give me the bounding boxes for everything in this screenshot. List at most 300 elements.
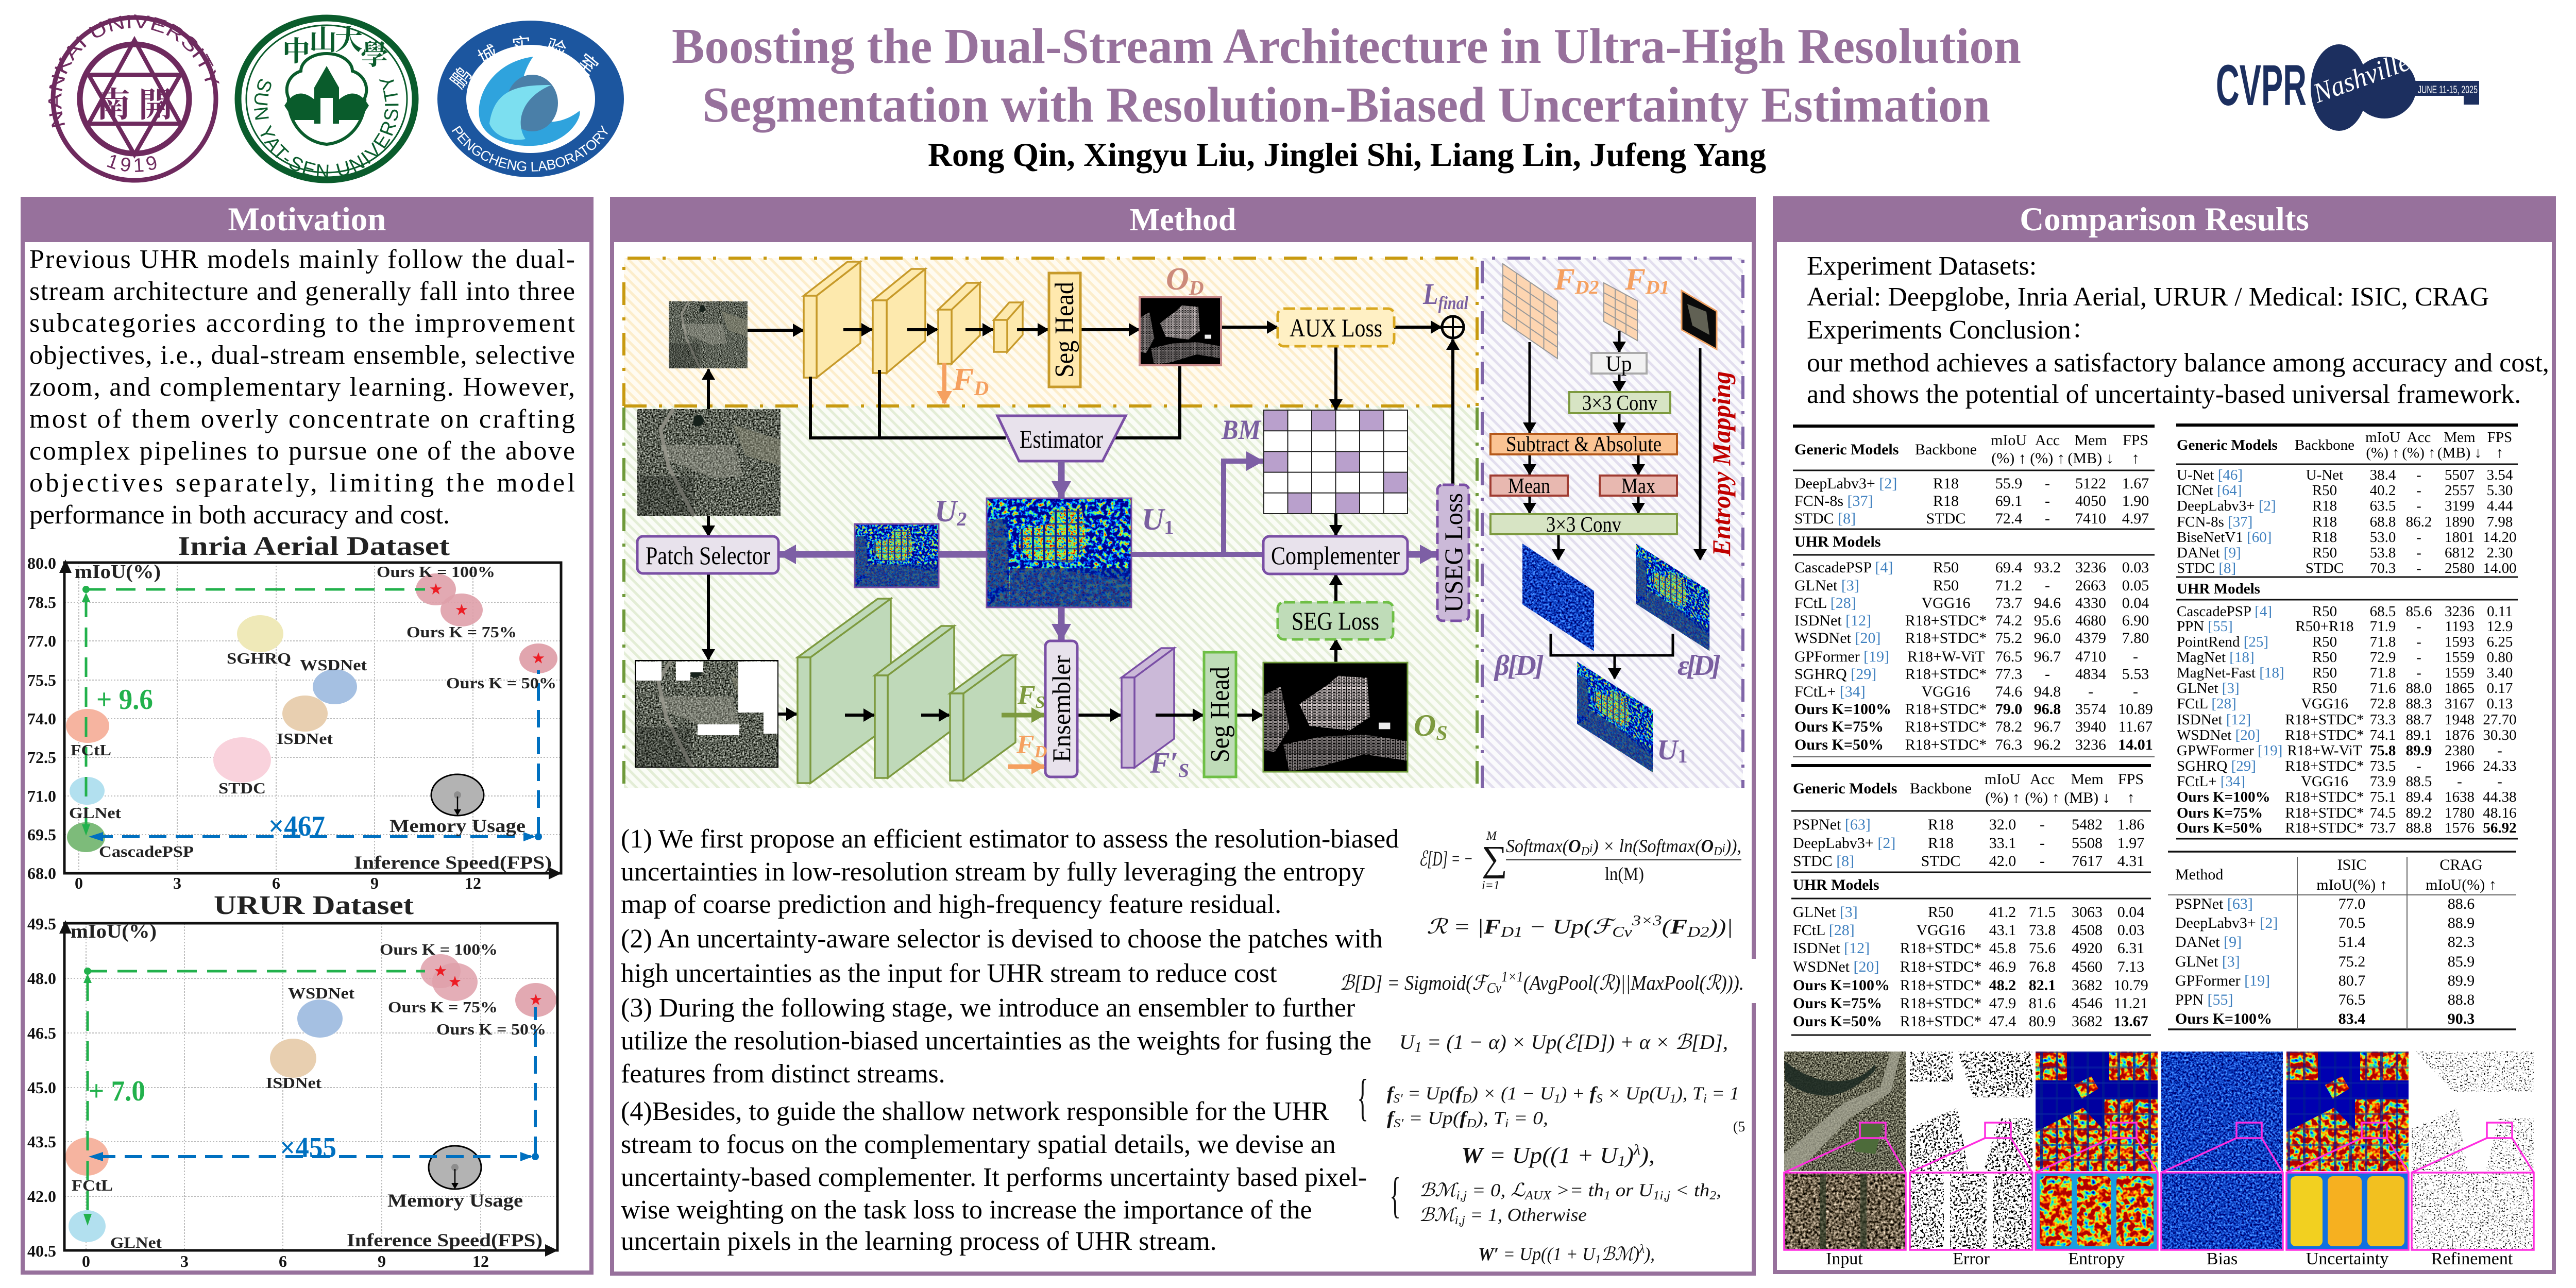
labels: F_D2 and F_D1: [1554, 262, 1669, 298]
formula: ensembler: D: [1462, 1092, 1471, 1106]
SEG loss: [1278, 602, 1393, 639]
formula: entropy: ln(M): [1605, 863, 1644, 884]
method description text: stream to focus on the complementary spatial details, we devise an: [621, 1130, 1336, 1159]
circled plus: [1442, 316, 1464, 338]
table: Inria Aerial results: R18: [1933, 475, 1959, 492]
table: DeepGlobe results: PointRend [25]: [2177, 634, 2268, 650]
table: DeepGlobe results: 89.9: [2406, 742, 2432, 759]
table: DeepGlobe results: -: [2416, 467, 2421, 483]
formula: ensembler: i: [1505, 1117, 1509, 1130]
method header: Method: [1130, 202, 1236, 238]
method description text: uncertain pixels in the learning process of UHR stream.: [621, 1227, 1217, 1256]
table: URUR results: 13.67: [2113, 1013, 2148, 1030]
table: Inria Aerial results: R50: [1933, 559, 1959, 576]
estimator detail arrows: [1530, 331, 1700, 679]
formula: ensembler: D: [1466, 1117, 1477, 1130]
table: DeepGlobe results: 89.1: [2406, 727, 2432, 743]
table: URUR results: 3682: [2072, 1013, 2103, 1030]
USEG loss: USEG Loss: [1439, 493, 1468, 613]
formula: ensembler: = 1: [1707, 1083, 1739, 1104]
table: DeepGlobe results: 71.6: [2370, 680, 2396, 697]
table: medical results: GLNet [3]: [2175, 953, 2240, 970]
table: DeepGlobe results: FCN-8s [37]: [2177, 514, 2252, 530]
selected-patch image: [635, 660, 778, 767]
column captions: Bias: [2207, 1249, 2238, 1268]
labels: F_D2 and F_D1: F: [1554, 262, 1575, 296]
table: URUR results: (%) ↑: [1985, 789, 2020, 806]
table: medical results: 88.9: [2448, 914, 2475, 931]
formula: residual: 3×3: [1631, 913, 1662, 929]
table: medical results: 51.4: [2338, 934, 2365, 951]
up box: [1591, 352, 1647, 376]
chart: URUR Dataset: [27, 891, 558, 1270]
table: DeepGlobe results: DANet [9]: [2177, 545, 2241, 561]
table: DeepGlobe results: 63.5: [2370, 498, 2396, 514]
point labels: Ours K = 100%: [380, 940, 498, 958]
table: DeepGlobe results: 74.5: [2370, 805, 2396, 821]
label: F_D arrow: F: [953, 362, 974, 397]
logo: Sun Yat-sen University: 中: [282, 29, 310, 69]
motivation text: most of them overly concentrate on crafting: [29, 404, 575, 434]
tick labels: [27, 914, 489, 1270]
labels: beta and epsilon: ε[D]: [1677, 650, 1721, 682]
table: medical results: CRAG: [2439, 856, 2483, 873]
point labels: Ours K = 75%: [388, 998, 498, 1016]
map: U1 result: [1577, 662, 1653, 772]
table: Inria Aerial results: [1793, 426, 2155, 757]
table: URUR results: R18+STDC*: [1900, 995, 1981, 1012]
table: DeepGlobe results: R50: [2312, 603, 2337, 620]
blue speed arrow: [89, 670, 542, 842]
table: URUR results: 7.13: [2117, 958, 2144, 975]
point labels: Ours K = 75%: [406, 623, 517, 641]
formula: binary mask: i,j: [1455, 1214, 1465, 1227]
chart title: Inria Aerial Dataset: [178, 532, 450, 561]
table: Inria Aerial results: Acc: [2035, 432, 2060, 449]
column: entropy: [2036, 1052, 2158, 1250]
table: Inria Aerial results: ISDNet [12]: [1794, 612, 1871, 629]
method description text: features from distinct streams.: [621, 1059, 945, 1089]
formula: uncertainty: 1: [1414, 1040, 1422, 1056]
column captions: [1826, 1249, 2513, 1268]
motivation text: zoom, and complementary learning. However,: [29, 372, 575, 402]
table: URUR results: 0.03: [2117, 922, 2144, 939]
tick labels: 42.0: [27, 1187, 56, 1206]
table: Inria Aerial results: 3236: [2075, 559, 2106, 576]
table: URUR results: 41.2: [1989, 904, 2016, 921]
table: medical results: DeepLabv3+ [2]: [2175, 914, 2278, 931]
table: Inria Aerial results: VGG16: [1922, 595, 1970, 612]
point labels: CascadePSP: [99, 842, 194, 860]
table: URUR results: 48.2: [1989, 977, 2016, 994]
table: DeepGlobe results: 53.8: [2370, 545, 2396, 561]
table: DeepGlobe results: 71.9: [2370, 618, 2396, 635]
method description text: wise weighting on the task loss to increase the importance of the: [621, 1195, 1312, 1225]
table: URUR results: Ours K=75%: [1793, 995, 1882, 1012]
table: Inria Aerial results: 5122: [2075, 475, 2106, 492]
table: DeepGlobe results: (MB) ↓: [2437, 445, 2482, 461]
table: URUR results: 73.8: [2029, 922, 2056, 939]
column captions: Input: [1826, 1249, 1863, 1268]
formula: entropy: Softmax(O: [1506, 836, 1582, 856]
table: DeepGlobe results: WSDNet [20]: [2177, 727, 2260, 743]
table: DeepGlobe results: MagNet [18]: [2177, 649, 2255, 666]
label: O_D: D: [1189, 276, 1204, 299]
table: URUR results: 33.1: [1989, 835, 2016, 852]
table: Inria Aerial results: Ours K=50%: [1794, 736, 1884, 753]
table: Inria Aerial results: 4.97: [2122, 510, 2149, 527]
table: Inria Aerial results: Mem: [2074, 432, 2107, 449]
table: URUR results: 5482: [2072, 816, 2103, 833]
table: DeepGlobe results: 0.17: [2487, 680, 2513, 697]
experiment text: Aerial: Deepglobe, Inria Aerial, URUR / Medical: ISIC, CRAG: [1807, 282, 2489, 312]
small output thumbnail: [1682, 291, 1717, 349]
title: [672, 19, 2021, 132]
label: U2: U: [935, 494, 957, 528]
motivation text: performance in both accuracy and cost.: [29, 500, 450, 530]
table: DeepGlobe results: R18+STDC*: [2285, 758, 2364, 774]
method description text: (1) We first propose an efficient estimator to assess the resolution-biased: [621, 824, 1399, 854]
experiment text: our method achieves a satisfactory balance among accuracy and cost,: [1807, 348, 2549, 378]
green improvement arrow: + 7.0: [89, 1075, 145, 1107]
table: Inria Aerial results: -: [2045, 510, 2050, 527]
table: DeepGlobe results: R18+STDC*: [2285, 711, 2364, 728]
experiment text: [1807, 251, 2549, 409]
table: Inria Aerial results: 96.0: [2034, 630, 2061, 647]
label: O_S: S: [1436, 721, 1448, 744]
table: DeepGlobe results: 2557: [2445, 482, 2475, 499]
logo: Pengcheng Laboratory: [437, 21, 624, 177]
column: error: [1910, 1052, 2032, 1250]
point labels: Inference Speed(FPS): [354, 852, 552, 873]
table: URUR results: R18+STDC*: [1900, 958, 1981, 975]
formula: weight W: W = Up((1 + U: [1461, 1143, 1607, 1168]
label: U1 result: 1: [1677, 745, 1687, 767]
column: uncertainty: [2286, 1052, 2409, 1250]
table: Inria Aerial results: R18+STDC*: [1905, 630, 1987, 647]
table: Inria Aerial results: 78.2: [1995, 718, 2022, 735]
formula: entropy: D: [1581, 845, 1589, 858]
tick labels: 75.5: [27, 671, 56, 689]
table: DeepGlobe results: 3236: [2445, 603, 2475, 620]
table: medical results: ISIC: [2337, 856, 2366, 873]
region: estimator detail: [1482, 258, 1743, 788]
table: DeepGlobe results: ↑: [2496, 445, 2503, 461]
tick labels: 46.5: [27, 1024, 56, 1042]
formula: binary mask: = 0, ℒ: [1467, 1180, 1526, 1200]
tick labels: 3: [173, 874, 181, 892]
mean box: Mean: [1508, 474, 1550, 498]
table: Inria Aerial results: Ours K=100%: [1794, 701, 1891, 718]
table: DeepGlobe results: 73.5: [2370, 758, 2396, 774]
table: DeepGlobe results: 48.16: [2483, 805, 2517, 821]
table: DeepGlobe results: R18+STDC*: [2285, 727, 2364, 743]
table: DeepGlobe results: 44.38: [2483, 789, 2517, 805]
logo: Sun Yat-sen University: SUN YAT-SEN UNIVERSITY: [254, 79, 399, 176]
table: DeepGlobe results: ICNet [64]: [2177, 482, 2242, 499]
mean box: [1490, 474, 1568, 498]
region: low-resolution stream: [624, 258, 1477, 406]
blue speed arrow: ×467: [268, 810, 325, 842]
motivation text: complex pipelines to pursue one of the above: [29, 436, 575, 466]
formula: binary mask: AUX: [1524, 1189, 1552, 1202]
table: URUR results: 4.31: [2117, 853, 2144, 870]
table: URUR results: 6.31: [2117, 940, 2144, 957]
table: DeepGlobe results: STDC: [2306, 560, 2344, 577]
formula: ensembler: ), T: [1475, 1108, 1506, 1128]
seg head: high-res: Seg Head: [1206, 667, 1235, 762]
label: L_final: final: [1438, 293, 1468, 313]
table: Inria Aerial results: 96.7: [2034, 648, 2061, 665]
table: Inria Aerial results: FPS: [2123, 432, 2148, 449]
table: medical results: 85.9: [2448, 953, 2475, 970]
formula: residual: D1: [1500, 924, 1522, 940]
table: DeepGlobe results: 6812: [2445, 545, 2475, 561]
formula: binary mask: 1: [1604, 1189, 1611, 1202]
formula: residual: D2: [1687, 924, 1709, 940]
uncertainty map U2: [855, 524, 939, 587]
formula: uncertainty: = (1 − α) × Up(ℰ[D]) + α × ℬ[D],: [1422, 1030, 1728, 1054]
table: URUR results: 4920: [2072, 940, 2103, 957]
table: Inria Aerial results: (%) ↑: [2030, 450, 2065, 467]
table: DeepGlobe results: 74.1: [2370, 727, 2396, 743]
table: DeepGlobe results: 40.2: [2370, 482, 2396, 499]
formula: binary mask: ℬℳ: [1419, 1205, 1453, 1225]
tick labels: 45.0: [27, 1078, 56, 1097]
formula: entropy: i: [1722, 842, 1725, 855]
table: DeepGlobe results: 12.9: [2487, 618, 2513, 635]
point labels: ISDNet: [277, 730, 333, 748]
formula: ensembler: f: [1460, 1108, 1468, 1128]
table: DeepGlobe results: 6.25: [2487, 634, 2513, 650]
point labels: [71, 921, 546, 1251]
labels: F_D2 and F_D1: D1: [1645, 277, 1669, 298]
column: refinement: [2412, 1052, 2534, 1250]
formula: ensembler: S′: [1394, 1117, 1404, 1130]
table: Inria Aerial results: FCtL [28]: [1794, 595, 1856, 612]
table: URUR results: FCtL [28]: [1793, 922, 1855, 939]
point labels: SGHRQ: [227, 649, 291, 667]
table: DeepGlobe results: 88.5: [2406, 773, 2432, 790]
table: DeepGlobe results: SGHRQ [29]: [2177, 758, 2256, 774]
repeated arrow through feature block: [1156, 714, 1203, 717]
F_D arrow lower: D: [1034, 742, 1047, 761]
formula: residual: Cv: [1612, 924, 1632, 940]
table: Inria Aerial results: 0.04: [2122, 595, 2149, 612]
table: DeepGlobe results: -: [2416, 545, 2421, 561]
table: DeepGlobe results: 73.7: [2370, 820, 2396, 836]
tick labels: 9: [370, 874, 379, 892]
table: Inria Aerial results: STDC [8]: [1794, 510, 1856, 527]
method description text: (4)Besides, to guide the shallow network responsible for the UHR: [621, 1097, 1329, 1126]
label: BM: BM: [1221, 414, 1262, 445]
formula: weight W prime: λ: [1639, 1243, 1645, 1256]
table: Inria Aerial results: GLNet [3]: [1794, 577, 1859, 594]
formula: ensembler: i: [1703, 1092, 1707, 1106]
subtract and absolute: Subtract & Absolute: [1506, 433, 1662, 456]
table: DeepGlobe results: Ours K=50%: [2177, 820, 2263, 836]
estimator: [997, 416, 1126, 461]
table: DeepGlobe results: 71.8: [2370, 665, 2396, 681]
table: DeepGlobe results: (%) ↑: [2366, 445, 2400, 461]
formula: ensembler: f: [1387, 1108, 1396, 1128]
table: Inria Aerial results: 6.90: [2122, 612, 2149, 629]
formula: binary mask: 1i,j: [1653, 1189, 1671, 1202]
table: Inria Aerial results: R18+STDC*: [1905, 718, 1987, 735]
table: DeepGlobe results: 7.98: [2487, 514, 2513, 530]
column: input: [1784, 1052, 1906, 1250]
table: URUR results: Generic Models: [1793, 780, 1897, 797]
logo: Sun Yat-sen University: 大: [335, 18, 363, 58]
table: DeepGlobe results: -: [2416, 529, 2421, 546]
table: DeepGlobe results: Backbone: [2295, 437, 2354, 453]
table: DeepGlobe results: U-Net: [2306, 467, 2343, 483]
gap in panel border beside formula: [1751, 959, 1758, 1003]
table: Inria Aerial results: 74.6: [1995, 683, 2022, 700]
F_S arrow: S: [1036, 693, 1045, 712]
table: Inria Aerial results: ↑: [2132, 450, 2139, 467]
column captions: Refinement: [2431, 1249, 2513, 1268]
table: Inria Aerial results: CascadePSP [4]: [1794, 559, 1893, 576]
table: Inria Aerial results: 95.6: [2034, 612, 2061, 629]
table: Inria Aerial results: STDC: [1926, 510, 1965, 527]
table: Inria Aerial results: R18: [1933, 493, 1959, 510]
table: DeepGlobe results: 3.54: [2487, 467, 2513, 483]
table: DeepGlobe results: DeepLabv3+ [2]: [2177, 498, 2276, 514]
table: DeepGlobe results: VGG16: [2301, 773, 2348, 790]
table: medical results: Ours K=100%: [2175, 1010, 2272, 1027]
table: DeepGlobe results: Generic Models: [2177, 437, 2278, 453]
table: DeepGlobe results: 0.11: [2487, 603, 2513, 620]
tick labels: 74.0: [27, 709, 56, 728]
low-res encoder blocks: [804, 262, 1023, 378]
BM grid: [1264, 410, 1408, 514]
table: Inria Aerial results: R18+STDC*: [1905, 701, 1987, 718]
formula: ensembler: 1: [1554, 1092, 1561, 1106]
table: DeepGlobe results: MagNet-Fast [18]: [2177, 665, 2284, 681]
formula: entropy: ∑: [1482, 839, 1507, 879]
table: medical results: 77.0: [2338, 895, 2365, 912]
table: URUR results: FPS: [2118, 771, 2144, 788]
table: Inria Aerial results: 10.89: [2118, 701, 2153, 718]
table: DeepGlobe results: R18+STDC*: [2285, 820, 2364, 836]
tick labels: 49.5: [27, 914, 56, 933]
table: URUR results: 5508: [2072, 835, 2103, 852]
table: Inria Aerial results: Generic Models: [1794, 441, 1899, 458]
table: URUR results: Acc: [2030, 771, 2055, 788]
formula: uncertainty: U: [1399, 1030, 1414, 1054]
table: URUR results: PSPNet [63]: [1793, 816, 1871, 833]
table: medical results: 90.3: [2448, 1010, 2475, 1027]
point labels: STDC: [218, 779, 266, 797]
table: Inria Aerial results: FCtL+ [34]: [1794, 683, 1866, 700]
point labels: WSDNet: [288, 984, 355, 1002]
table: DeepGlobe results: FCtL [28]: [2177, 696, 2236, 712]
table: DeepGlobe results: 2580: [2445, 560, 2475, 577]
label: O_S: O: [1414, 708, 1436, 742]
table: medical results: DANet [9]: [2175, 934, 2242, 951]
chart: Inria Aerial Dataset: [27, 532, 562, 892]
label: F_D arrow: D: [973, 377, 989, 400]
formula: ensembler: = Up(: [1403, 1083, 1457, 1104]
table: Inria Aerial results: SGHRQ [29]: [1794, 666, 1876, 683]
table: Inria Aerial results: 4834: [2075, 666, 2106, 683]
table: DeepGlobe results: 88.3: [2406, 696, 2432, 712]
table: Inria Aerial results: 5.53: [2122, 666, 2149, 683]
table: DeepGlobe results: 14.20: [2483, 529, 2517, 546]
table: URUR results: R18: [1928, 835, 1954, 852]
table: URUR results: R18+STDC*: [1900, 940, 1981, 957]
table: DeepGlobe results: Ours K=100%: [2177, 789, 2270, 805]
map: beta: [1522, 544, 1594, 651]
repeated encoder arrows: [845, 714, 949, 717]
method description text: uncertainty-based complementer. It performs uncertainty based pixel-: [621, 1163, 1367, 1192]
logo: CVPR Nashville: CVPR: [2216, 53, 2307, 117]
table: Inria Aerial results: -: [2133, 683, 2138, 700]
formula: binary mask: < th: [1670, 1180, 1709, 1200]
table: Inria Aerial results: 7.80: [2122, 630, 2149, 647]
table: Inria Aerial results: 1.90: [2122, 493, 2149, 510]
formula: ensembler: f: [1387, 1083, 1395, 1104]
table: Inria Aerial results: 7410: [2075, 510, 2106, 527]
labels: F_D2 and F_D1: F: [1625, 262, 1646, 296]
table: URUR results: R50: [1928, 904, 1954, 921]
table: DeepGlobe results: 24.33: [2483, 758, 2517, 774]
motivation text: subcategories according to the improvement: [29, 309, 575, 338]
formula: weight W prime: 1: [1595, 1253, 1601, 1266]
scatter bubbles: [66, 573, 557, 852]
table: Inria Aerial results: 94.6: [2034, 595, 2061, 612]
table: DeepGlobe results: 70.3: [2370, 560, 2396, 577]
table: URUR results: 3063: [2072, 904, 2103, 921]
formula: binary mask: ℬℳ: [1419, 1180, 1453, 1200]
entropy mapping label: Entropy Mapping: [1707, 371, 1736, 556]
title: Boosting the Dual-Stream Architecture in Ultra-High Resolution: [672, 19, 2021, 74]
table: DeepGlobe results: Mem: [2444, 429, 2476, 446]
formula: ensembler: [1357, 1069, 1745, 1135]
F_S arrow: [1002, 681, 1045, 715]
tick labels: 77.0: [27, 632, 56, 650]
formula: weight W: ),: [1639, 1143, 1655, 1168]
formula: ensembler: f: [1590, 1083, 1598, 1104]
table: Inria Aerial results: -: [2045, 493, 2050, 510]
table: DeepGlobe results: R50: [2312, 665, 2337, 681]
low-res input image: [669, 301, 748, 368]
table: medical results: 88.8: [2448, 991, 2475, 1008]
table: DeepGlobe results: 88.8: [2406, 820, 2432, 836]
formula: ensembler: f: [1456, 1083, 1464, 1104]
tick labels: 9: [378, 1252, 386, 1270]
table: URUR results: 4508: [2072, 922, 2103, 939]
label: O_D: O: [1166, 262, 1189, 297]
table: URUR results: UHR Models: [1793, 876, 1879, 893]
table: Inria Aerial results: 55.9: [1995, 475, 2022, 492]
table: DeepGlobe results: 0.13: [2487, 696, 2513, 712]
table: DeepGlobe results: 3.40: [2487, 665, 2513, 681]
table: Inria Aerial results: DeepLabv3+ [2]: [1794, 475, 1897, 492]
table: URUR results: 75.6: [2029, 940, 2056, 957]
table: Inria Aerial results: VGG16: [1922, 683, 1970, 700]
table: DeepGlobe results: -: [2497, 742, 2502, 759]
table: Inria Aerial results: 96.8: [2034, 701, 2061, 718]
formula: bias: (AvgPool(ℛ)||MaxPool(ℛ))).: [1523, 971, 1744, 994]
table: URUR results: VGG16: [1917, 922, 1965, 939]
table: DeepGlobe results: R18+W-ViT: [2287, 742, 2362, 759]
table: Inria Aerial results: -: [2045, 475, 2050, 492]
table: Inria Aerial results: 73.7: [1995, 595, 2022, 612]
table: Inria Aerial results: 2663: [2075, 577, 2106, 594]
formula: binary mask: [1389, 1167, 1721, 1227]
